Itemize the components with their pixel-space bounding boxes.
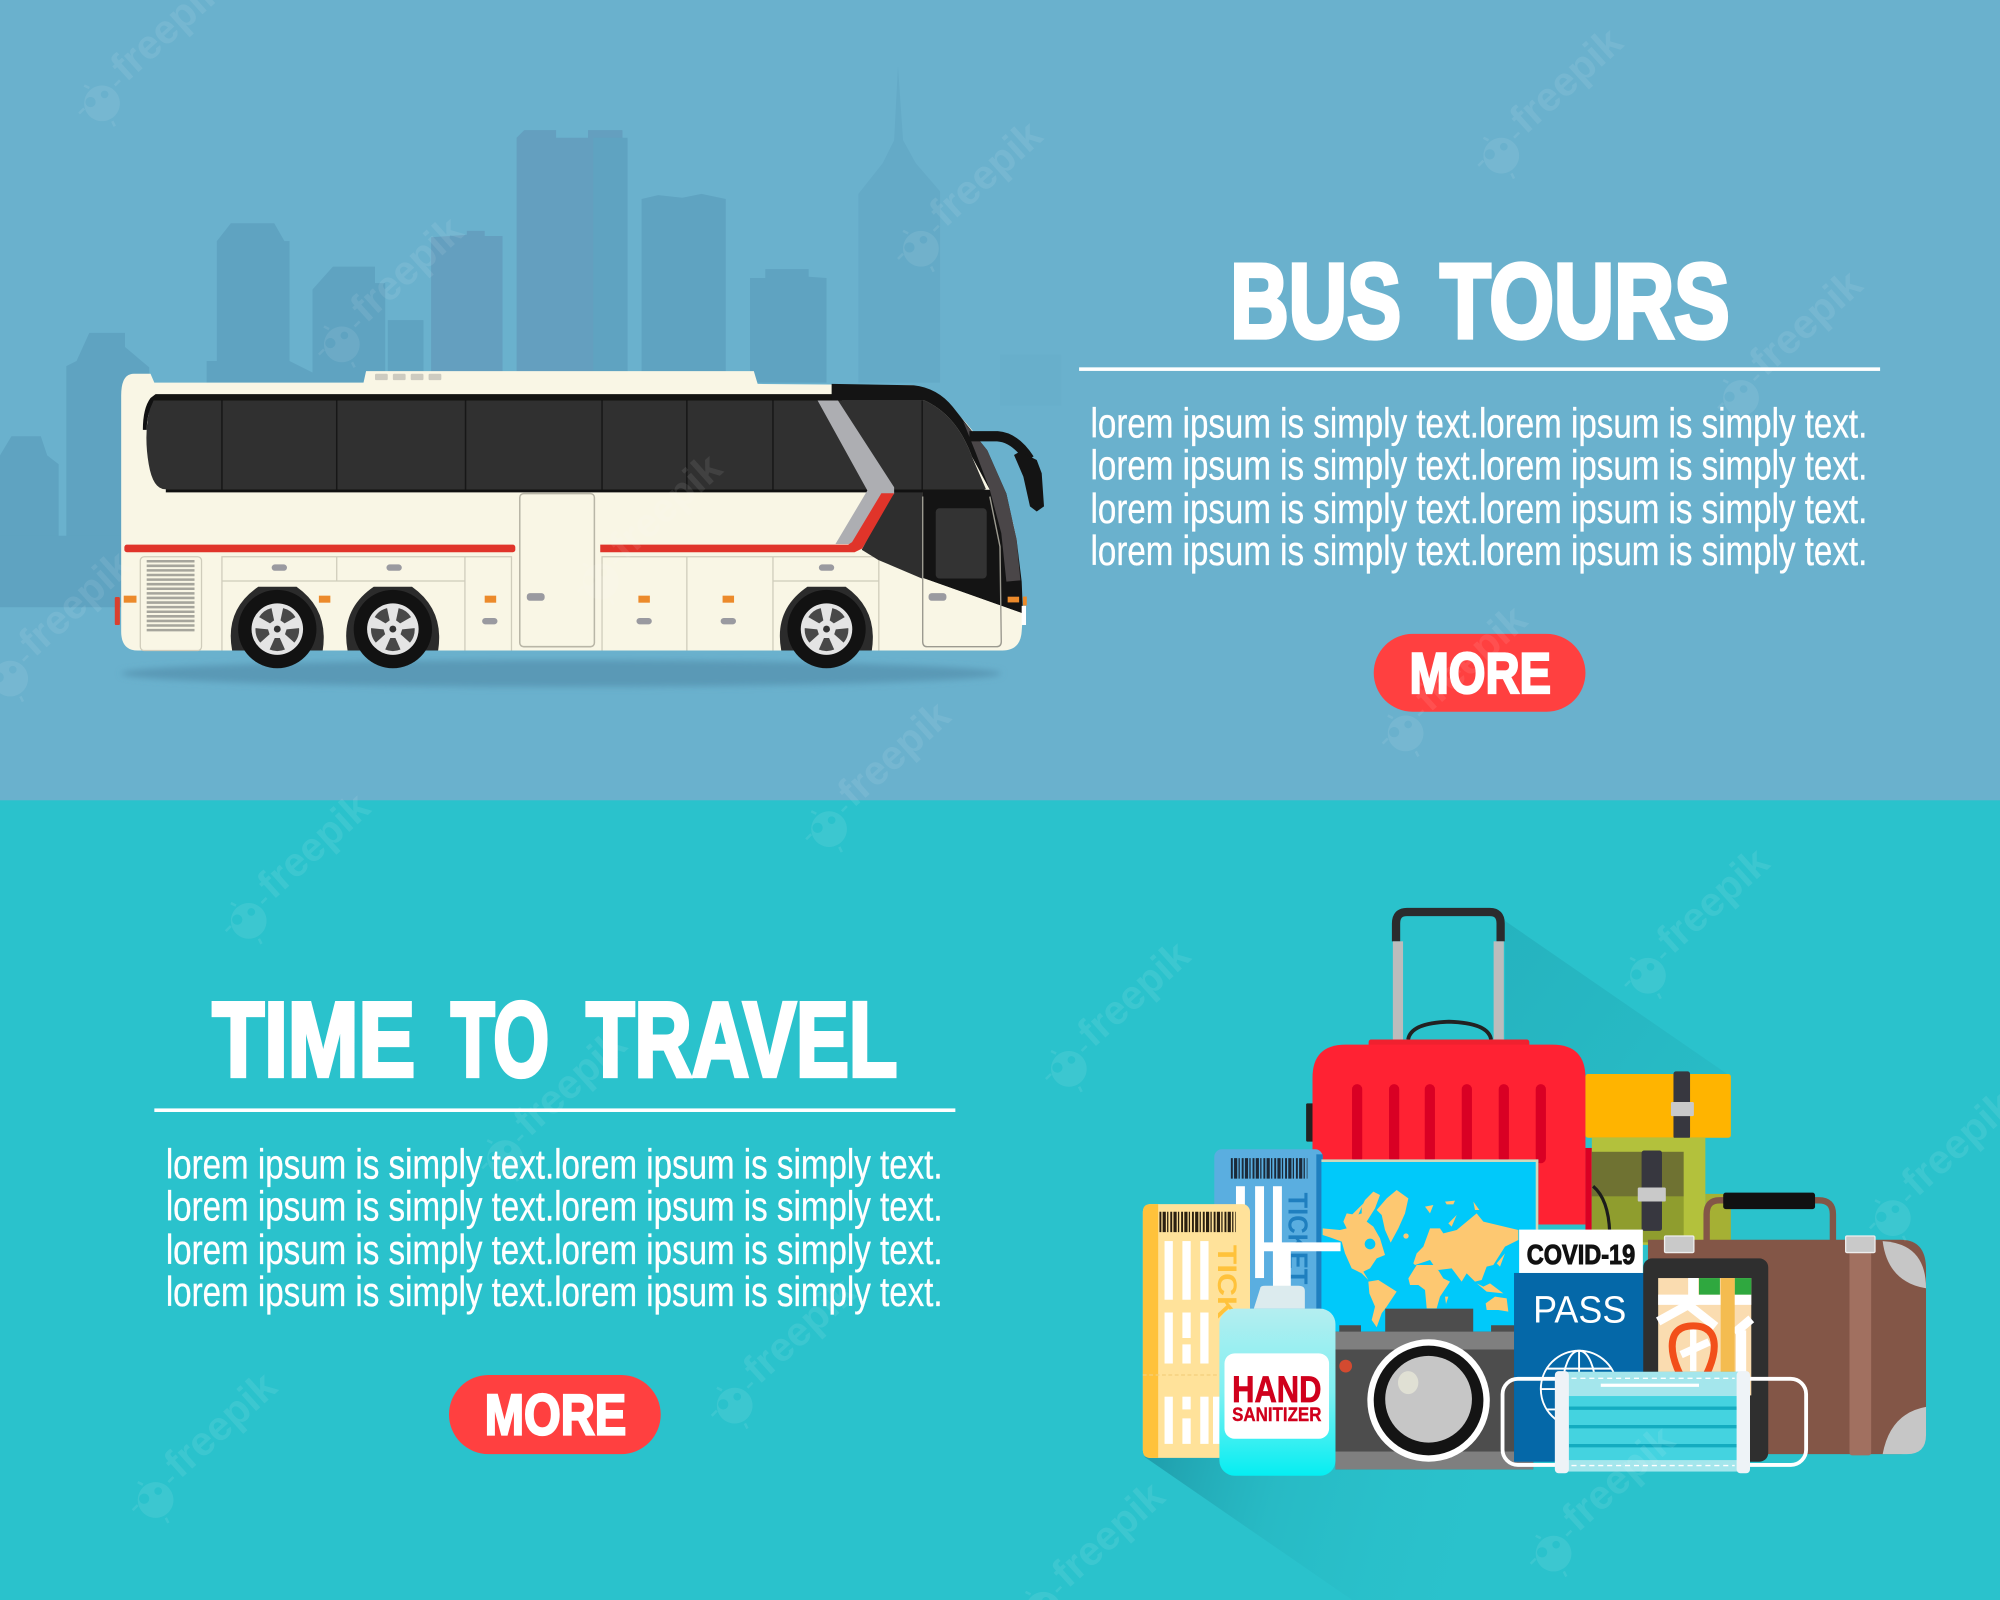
icon: phone with map <box>1643 1258 1768 1462</box>
button: more (top): MORE <box>1409 642 1551 706</box>
bus front door <box>923 497 1001 647</box>
icon: red suitcase <box>1306 912 1592 1237</box>
bus <box>115 371 1044 668</box>
text block: time to travel <box>166 1141 943 1315</box>
label: covid-19 <box>1519 1230 1643 1273</box>
icon: camera <box>1335 1309 1533 1469</box>
text block: time to travel: lorem ipsum is simply text.lorem ipsum is simply text. <box>166 1268 943 1315</box>
icon: passport <box>1514 1273 1647 1462</box>
watermarks: freepik: freepik <box>155 1362 286 1486</box>
watermarks: freepik: freepik <box>829 691 959 815</box>
bus windows <box>146 400 986 489</box>
watermarks: freepik: freepik <box>600 444 731 568</box>
icon: face mask <box>1503 1371 1806 1473</box>
watermarks: freepik: freepik <box>1647 838 1778 962</box>
bus body <box>121 371 1023 651</box>
button: more (bottom) <box>449 1375 661 1454</box>
watermarks: freepik: freepik <box>1068 931 1199 1055</box>
icon: brown suitcase <box>1648 1193 1926 1455</box>
heading: time to travel: TO <box>451 981 549 1099</box>
icon: blue ticket: TICKET <box>1282 1193 1313 1284</box>
watermarks: freepik: freepik <box>1501 18 1631 142</box>
icon: hand sanitizer: HAND <box>1232 1369 1321 1410</box>
bus door window <box>936 508 987 578</box>
icon: yellow ticket <box>1143 1204 1250 1458</box>
heading: time to travel: TIME <box>212 981 415 1099</box>
watermarks: freepik: freepik <box>1405 596 1536 720</box>
bus ground shadow <box>121 660 1001 687</box>
watermarks: freepik: freepik <box>1741 260 1871 384</box>
button: more (top) <box>1374 634 1585 712</box>
icon: yellow ticket: TICK <box>1212 1245 1242 1320</box>
watermarks: freepik: freepik <box>1553 1416 1683 1540</box>
bus chevron <box>818 401 894 544</box>
text block: time to travel: lorem ipsum is simply text.lorem ipsum is simply text. <box>166 1226 943 1273</box>
bus wheel arches <box>231 587 873 651</box>
watermarks: freepik: freepik <box>505 1021 635 1144</box>
bus engine vent <box>147 561 195 630</box>
watermarks: freepik: freepik <box>10 541 140 665</box>
icon: hand sanitizer: SANITIZER <box>1232 1404 1321 1426</box>
text block: time to travel: lorem ipsum is simply text.lorem ipsum is simply text. <box>166 1183 943 1230</box>
bus handles and markers <box>272 564 946 624</box>
icon: blue ticket <box>1214 1149 1323 1321</box>
panel: bottom background <box>0 800 2000 1600</box>
luggage long shadow <box>1144 921 1731 1600</box>
button: more (bottom): MORE <box>485 1383 626 1447</box>
text block: time to travel: lorem ipsum is simply text.lorem ipsum is simply text. <box>166 1141 943 1188</box>
watermarks: freepik: freepik <box>1043 1472 1173 1596</box>
heading: bus tours: BUS <box>1230 242 1401 360</box>
icon: green backpack <box>1592 1138 1731 1245</box>
bus red stripes <box>124 493 894 552</box>
heading: time to travel <box>212 981 897 1099</box>
bus side details <box>140 494 879 651</box>
watermarks: freepik: freepik <box>734 1268 865 1392</box>
city skyline <box>0 66 1061 607</box>
heading: time to travel: TRAVEL <box>586 981 897 1099</box>
bus front black shell <box>832 384 1023 614</box>
bus mirror <box>969 436 1044 511</box>
icon: hand sanitizer <box>1219 1242 1341 1476</box>
label: covid-19: COVID-19 <box>1527 1239 1635 1270</box>
watermarks: freepik: freepik <box>920 111 1051 235</box>
text block: bus tours <box>1091 399 1867 574</box>
travel items illustration <box>1143 912 1926 1476</box>
icon: world map <box>1321 1159 1538 1332</box>
bus wheels <box>238 590 316 668</box>
divider: time to travel <box>154 1108 955 1112</box>
watermarks: freepik: freepik <box>248 783 379 907</box>
bus lower front panel <box>862 491 922 579</box>
heading: bus tours <box>1230 242 1730 360</box>
heading: bus tours: TOURS <box>1440 242 1730 360</box>
panel: top background <box>0 0 2000 800</box>
divider: bus tours <box>1079 367 1880 371</box>
bus roof lights <box>375 374 441 380</box>
icon: yellow sleeping mat <box>1585 1071 1731 1139</box>
icon: passport: PASS <box>1533 1289 1626 1332</box>
watermarks: freepik: freepik <box>341 207 472 331</box>
